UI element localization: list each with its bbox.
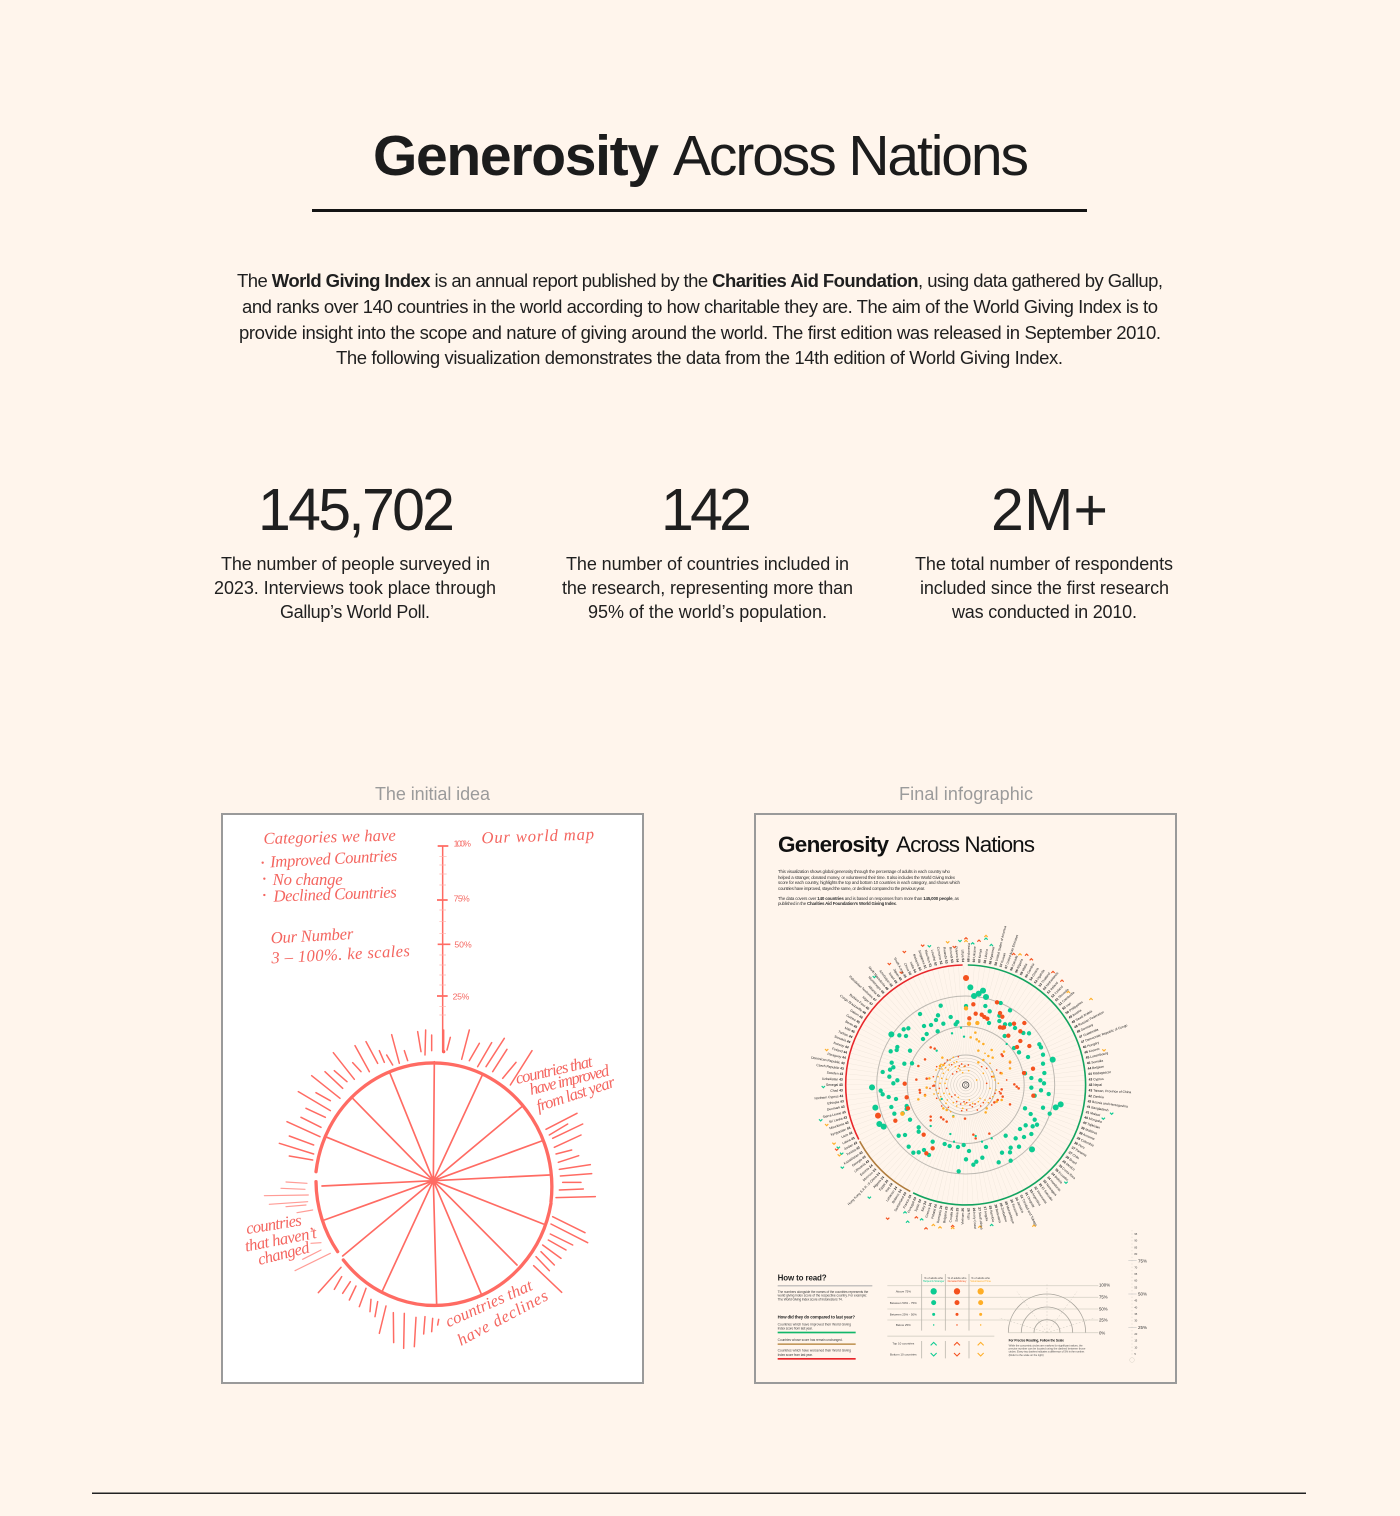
- stat: people surveyed: [214, 477, 496, 622]
- country labels, left half: Libya 54: [961, 950, 965, 962]
- country labels, right half: 44 Belgium: [1087, 1065, 1104, 1071]
- legend table: % of adults who: [948, 1276, 967, 1280]
- country labels, left half: North Macedonia 48: [867, 966, 889, 991]
- country labels, right half: 41 Malawi: [1085, 1110, 1101, 1117]
- sketch wheel with spokes and ticks: countries that: [514, 1052, 595, 1088]
- semicircle scale diagram: 50%: [1099, 1306, 1108, 1311]
- country labels, left half: Burundi 53: [948, 947, 954, 963]
- country labels, left half: Albania 47: [867, 985, 881, 999]
- title: [373, 124, 1029, 188]
- country labels, left half: Burkina Faso 46: [849, 993, 870, 1011]
- data dots: [872, 978, 1061, 1171]
- country labels, left half: Romania 24: [936, 1205, 943, 1223]
- vertical reference scale: 40: [1134, 1305, 1138, 1309]
- country labels, right half: 26 Togo: [966, 1208, 971, 1220]
- country labels, right half: 57 United Arab Emirates: [1004, 934, 1019, 969]
- stat: people surveyed: Gallup’s World Poll.: [280, 602, 430, 622]
- country labels, left half: Laos 43: [841, 1131, 853, 1139]
- country labels, right half: 49 Austria: [1068, 1008, 1082, 1020]
- country labels, right half: 54 Ghana: [1029, 967, 1040, 981]
- country labels, right half: 46 Hungary: [1082, 1040, 1100, 1050]
- semicircle scale diagram: 0%: [1099, 1330, 1105, 1335]
- country labels, left half: Congo Brazzaville 46: [839, 994, 867, 1015]
- country labels, right half: 68 Indonesia: [966, 943, 971, 962]
- country labels, right half: 28 Namibia: [988, 1205, 995, 1222]
- vertical reference scale: 60: [1134, 1279, 1138, 1283]
- legend table: Top 10 countries: [892, 1342, 915, 1346]
- country labels, right half: 58 United States of America: [994, 925, 1007, 966]
- country labels, left half: Kazakhstan 43: [843, 1150, 864, 1166]
- vertical reference scale: 5: [1134, 1352, 1136, 1356]
- stat: people surveyed: The number of people surveyed in: [221, 554, 490, 574]
- country labels, right half: 51 Cambodia: [1058, 991, 1075, 1006]
- note: precise reading: [1009, 1338, 1086, 1357]
- country labels, right half: 35 Costa Rica: [1058, 1164, 1076, 1180]
- country labels, right half: 53 Thailand: [1038, 971, 1051, 988]
- mini description: countries have improved, stayed the same, or declined compared to the previous year.: [778, 886, 925, 891]
- panel: initial sketch: [222, 814, 643, 1383]
- country labels, left half: Serbia 25: [955, 1207, 960, 1222]
- vertical reference scale: 80: [1134, 1252, 1138, 1256]
- note: precise reading: While the concentric circles are markers for significant values, the: [1009, 1343, 1083, 1347]
- country labels, left half: Palestinian Territories 47: [848, 975, 877, 1003]
- country labels, right half: [966, 925, 1131, 1230]
- country labels, left half: Comoros 52: [936, 946, 943, 965]
- how to read text: How did they do compared to last year?: [778, 1315, 855, 1320]
- sketch notes and vertical scale: Our Number: [270, 924, 354, 947]
- vertical reference scale: 45: [1134, 1299, 1138, 1303]
- country labels, left half: Jordan 43: [843, 1141, 858, 1151]
- panel: final infographic: [755, 814, 1176, 1383]
- country labels, left half: Norway 44: [833, 1041, 849, 1050]
- vertical reference scale: 55: [1134, 1285, 1138, 1289]
- country labels, left half: Guyana 54: [954, 946, 960, 963]
- country labels, left half: Morocco 24: [862, 1167, 877, 1182]
- country labels, left half: Lesotho 52: [930, 949, 938, 966]
- intro paragraph: The following visualization demonstrates the data from the 14th edition of World Giving Index.: [336, 347, 1063, 368]
- legend table: Below 25%: [896, 1323, 911, 1327]
- country labels, right half: 57 Kuwait: [999, 953, 1007, 968]
- country labels, left half: Finland 44: [832, 1047, 848, 1055]
- stat: total respondents: included since the first research: [920, 578, 1169, 598]
- vertical reference scale: 25%: [1138, 1325, 1147, 1330]
- country labels, right half: 53 Netherlands: [1042, 971, 1060, 991]
- country labels, left half: Paraguay 44: [827, 1052, 846, 1060]
- how to read text: Countries which have worsened their World Giving: [778, 1349, 851, 1353]
- how to read text: [778, 1274, 872, 1360]
- how to read text: world giving index score of the respective country. For example:: [778, 1294, 867, 1298]
- country labels, right half: 34 Honduras: [1046, 1175, 1062, 1192]
- legend table: [887, 1274, 1098, 1358]
- country labels, right half: 56 Nigeria: [1014, 958, 1024, 974]
- sketch wheel with spokes and ticks: from last year: [534, 1072, 618, 1115]
- mini description: This visualization shows global generosity through the percentage of adults in each country who: [778, 869, 951, 874]
- country labels, right half: 33 El Salvador: [1038, 1182, 1054, 1203]
- country labels, left half: Dominican Republic 43: [811, 1056, 845, 1065]
- country labels, left half: Belarus 24: [891, 1188, 903, 1204]
- country labels, right half: 51 Slovenia: [1054, 988, 1070, 1002]
- country labels, left half: Slovakia 44: [834, 1035, 851, 1044]
- country labels, right half: 38 Colombia: [1076, 1136, 1095, 1148]
- country labels, left half: China 50: [903, 962, 912, 976]
- sketch notes and vertical scale: No change: [272, 870, 343, 889]
- country labels, left half: Kyrgyzstan 43: [830, 1126, 851, 1137]
- country labels, left half: Estonia 24: [859, 1163, 874, 1177]
- country labels, left half: Sweden 43: [827, 1071, 844, 1076]
- stat: countries included: 142: [661, 477, 752, 543]
- country labels, right half: 48 Germany: [1076, 1023, 1094, 1034]
- country labels, left half: Uzbekistan 43: [822, 1077, 843, 1082]
- legend table: Between 25% - 50%: [890, 1313, 917, 1317]
- how to read text: The World Giving Index score of Indonesia is 74.: [778, 1298, 843, 1302]
- legend table: % of adults who: [924, 1276, 944, 1280]
- intro paragraph: The World Giving Index is an annual report published by the Charities Aid Foundation, using data gathered by Gallup,: [237, 270, 1163, 291]
- country labels, left half: Mauritius 51: [924, 949, 933, 968]
- note: precise reading: For Precise Reading, Follow the Scale: [1009, 1338, 1064, 1342]
- mini description: published in the Charities Aid Foundation’s World Giving Index.: [778, 901, 897, 906]
- country labels, left half: Azerbaijan 48: [878, 969, 894, 988]
- country labels, right half: 33 Nicaragua: [1042, 1179, 1058, 1197]
- country labels, left half: Croatia 25: [949, 1207, 954, 1223]
- country labels, right half: 42 Zambia: [1088, 1094, 1104, 1099]
- country labels, left half: Latvia 43: [842, 1136, 856, 1145]
- country labels, left half: South Korea 49: [893, 957, 908, 979]
- country labels, right half: 30 Jamaica: [1014, 1196, 1025, 1214]
- mini description: The data covers over 140 countries and is based on responses from more than 145,000 people, as: [778, 896, 960, 901]
- stat: people surveyed: 145,702: [258, 477, 455, 543]
- vertical reference scale: 95: [1134, 1232, 1138, 1236]
- country labels, right half: 55 Malta: [1019, 963, 1028, 976]
- country labels, right half: 52 Ireland: [1046, 981, 1059, 995]
- sketch wheel with spokes and ticks: changed: [256, 1238, 312, 1269]
- country labels, left half: Mauritania 43: [829, 1120, 849, 1130]
- sketch notes and vertical scale: 75%: [454, 893, 470, 903]
- country labels, left half: Mali 45: [844, 1026, 856, 1034]
- stat: countries included: [562, 477, 853, 622]
- country labels, left half: Italy 24: [920, 1200, 928, 1212]
- country labels, right half: 36 Mexico: [1061, 1159, 1076, 1172]
- country labels, left half: Israel 49: [888, 972, 898, 985]
- country labels, left half: Niger 47: [862, 995, 874, 1007]
- vertical reference scale: 35: [1134, 1312, 1138, 1316]
- country labels, right half: 29 Zimbabwe: [999, 1202, 1008, 1223]
- how to read text: How to read?: [778, 1274, 827, 1283]
- country labels, left half: Rwanda 53: [942, 947, 949, 964]
- vertical reference scale: 15: [1134, 1339, 1138, 1343]
- legend table: Bottom 10 countries: [890, 1353, 917, 1357]
- semicircle scale diagram: 75%: [1099, 1294, 1108, 1299]
- sketch notes and vertical scale: 25%: [453, 991, 470, 1001]
- semicircle scale diagram: 100%: [1099, 1283, 1110, 1288]
- country labels, right half: 30 Tanzania: [1009, 1199, 1019, 1217]
- sketch notes and vertical scale: Categories we have: [263, 826, 397, 848]
- vertical reference scale: 70: [1134, 1265, 1138, 1269]
- country labels, left half: Iraq 24: [884, 1182, 894, 1193]
- country labels, right half: 42 Bosnia and Herzegovina: [1087, 1099, 1128, 1109]
- sketch notes and vertical scale: 100%: [454, 838, 471, 848]
- country labels, left half: Tunisia 43: [846, 1145, 861, 1157]
- country labels, right half: 46 Kosovo: [1084, 1047, 1100, 1055]
- country labels, left half: Senegal 43: [826, 1083, 843, 1087]
- title: Across Nations: [673, 124, 1029, 188]
- note: precise reading: circles. Every two dashes indicates a difference of 5% in the number.: [1009, 1349, 1085, 1353]
- country labels, left half: Guinea 45: [845, 1013, 861, 1025]
- country labels, right half: 43 Nepal: [1089, 1083, 1102, 1087]
- mini description: [778, 869, 961, 906]
- country labels, right half: 58 Myanmar: [988, 945, 996, 965]
- country labels, left half: Bulgaria 25: [942, 1206, 949, 1223]
- stat: total respondents: [915, 477, 1173, 622]
- legend table: % of adults who: [971, 1276, 991, 1280]
- country labels, right half: 47 Democratic Republic of Congo: [1080, 1023, 1128, 1044]
- sketch wheel with spokes and ticks: [243, 1030, 618, 1350]
- sketch wheel with spokes and ticks: that haven’t: [243, 1223, 318, 1256]
- note: precise reading: precise number can be located using the dashed between those: [1009, 1346, 1086, 1350]
- country labels, right half: 45 Luxembourg: [1085, 1051, 1109, 1060]
- country labels, left half: Portugal 24: [907, 1196, 917, 1213]
- radial grid: [877, 996, 1055, 1174]
- country labels, right half: 54 Uganda: [1033, 969, 1046, 984]
- country labels, right half: 40 Tajikistan: [1082, 1120, 1101, 1130]
- country labels, left half: Egypt 24: [878, 1179, 889, 1192]
- vertical reference scale: 10: [1134, 1345, 1138, 1349]
- legend table: Donated Money: [948, 1279, 967, 1283]
- country labels, left half: Northern Cyprus 43: [814, 1094, 844, 1100]
- legend table: Between 50% - 75%: [890, 1301, 917, 1305]
- country labels, left half: Malaysia 50: [912, 954, 922, 972]
- country labels, right half: 28 Botswana: [994, 1204, 1002, 1223]
- vertical reference scale: 20: [1134, 1332, 1138, 1336]
- semicircle scale diagram: 25%: [1099, 1318, 1108, 1323]
- country labels, left half: Georgia 43: [851, 1155, 867, 1168]
- mini title: Generosity: [778, 832, 889, 857]
- country labels, left half: Vietnam 25: [961, 1208, 965, 1225]
- chevrons: top and bottom ten markers: [819, 935, 1113, 1229]
- legend: how to read: [778, 1230, 1147, 1362]
- how to read text: The numbers alongside the names of the countries represents the: [778, 1290, 869, 1294]
- legend table: Volunteered Time: [970, 1279, 992, 1283]
- country labels, left half: Benin 45: [845, 1020, 858, 1029]
- country labels, right half: 37 Panama: [1071, 1146, 1087, 1158]
- mini title: Across Nations: [896, 832, 1035, 857]
- radial chart: [811, 925, 1131, 1230]
- country labels, left half: Sri Lanka 43: [829, 1115, 848, 1124]
- country labels, right half: 27 Angola: [983, 1206, 989, 1221]
- sketch notes and vertical scale: Declined Countries: [272, 882, 397, 906]
- mini title: [778, 832, 1035, 857]
- country labels, right half: 39 Armenia: [1078, 1131, 1095, 1141]
- country labels, right half: 37 Chile: [1068, 1150, 1080, 1160]
- country labels, right half: 45 Somalia: [1086, 1059, 1104, 1065]
- note: precise reading: (Refer to the scale on the right): [1009, 1353, 1044, 1357]
- country labels, right half: 44 Madagascar: [1088, 1070, 1112, 1076]
- country labels, left half: Chad 43: [830, 1088, 843, 1093]
- country labels, right half: 29 Mozambique: [1004, 1201, 1015, 1224]
- vertical reference scale: 90: [1134, 1239, 1138, 1243]
- country labels, right half: 39 Moldova: [1080, 1126, 1098, 1136]
- stat: countries included: the research, representing more than: [562, 578, 853, 598]
- country labels, left half: France 24: [902, 1194, 912, 1209]
- country labels, right half: 41 Bangladesh: [1086, 1105, 1109, 1112]
- intro paragraph: [237, 270, 1163, 368]
- sketch notes and vertical scale: Improved Countries: [269, 846, 398, 871]
- country labels, right half: 36 Brazil: [1065, 1155, 1078, 1166]
- country labels, left half: Turkiye 44: [837, 1030, 853, 1039]
- country labels, left half: India 50: [909, 961, 917, 974]
- country labels, right half: 35 Ecuador: [1054, 1168, 1070, 1183]
- stat: total respondents: was conducted in 2010.: [951, 602, 1137, 622]
- country labels, right half: 43 Cyprus: [1088, 1077, 1104, 1082]
- country labels, right half: 50 Philippines: [1065, 1000, 1084, 1015]
- country labels, left half: Ethiopia 43: [827, 1099, 844, 1105]
- country labels, left half: Czech Republic 43: [816, 1063, 844, 1071]
- sketch notes and vertical scale: Our world map: [481, 824, 594, 847]
- country labels, right half: 60 Kenya: [977, 949, 983, 963]
- outer arcs: improved, unchanged, declined: [846, 965, 1086, 1205]
- country labels, right half: 60 Ukraine: [972, 946, 977, 962]
- country labels, left half: Japan 49: [892, 968, 903, 982]
- vertical reference scale: [1128, 1230, 1147, 1362]
- footer rule: [92, 1492, 1306, 1494]
- country labels, right half: 48 Russian Federation: [1073, 1010, 1105, 1029]
- semicircle scale diagram: [999, 1283, 1110, 1335]
- country labels, left half: Algeria 24: [872, 1175, 885, 1189]
- country labels, right half: 31 Uruguay: [1024, 1191, 1036, 1209]
- country labels, right half: 26 Ivory Coast: [972, 1208, 977, 1229]
- country labels, right half: 40 Mongolia: [1084, 1115, 1102, 1124]
- vertical reference scale: 65: [1134, 1272, 1138, 1276]
- intro paragraph: and ranks over 140 countries in the world according to how charitable they are. The aim of the World Giving Index is to: [242, 296, 1158, 317]
- country labels, right half: 43 Taiwan, Province of China: [1088, 1088, 1131, 1094]
- country labels, right half: 47 Guatemala: [1078, 1027, 1099, 1039]
- country labels, right half: 50 Iran: [1061, 1001, 1072, 1011]
- stat: people surveyed: 2023. Interviews took place through: [214, 578, 496, 598]
- mini description: score for each country, highlights the top and bottom 10 countries in each category, and shows which: [778, 880, 961, 885]
- country labels, left half: Poland 24: [930, 1204, 938, 1219]
- legend table: Helped A Stranger: [923, 1279, 945, 1283]
- country labels, left half: Denmark 43: [827, 1105, 845, 1112]
- how to read text: Countries which have improved their World Giving: [778, 1323, 851, 1327]
- vertical reference scale: 85: [1134, 1245, 1138, 1249]
- heading: final infographic: Final infographic: [899, 784, 1033, 804]
- country labels, left half: Lithuania 43: [853, 1159, 870, 1173]
- country labels, left half: Greece 24: [924, 1202, 933, 1218]
- country labels, left half: Lebanon 24: [885, 1185, 898, 1202]
- country labels, left half: [811, 946, 965, 1225]
- country labels, right half: 27 South Africa: [977, 1207, 984, 1230]
- intro paragraph: provide insight into the scope and nature of giving around the world. The first edition was released in September 2010.: [239, 322, 1161, 343]
- sketch wheel with spokes and ticks: countries: [245, 1210, 303, 1238]
- title: Generosity: [373, 124, 659, 188]
- country labels, right half: 58 Liberia: [983, 949, 989, 964]
- country labels, right half: 38 Peru: [1073, 1141, 1086, 1150]
- country labels, right half: 32 Argentina: [1029, 1189, 1042, 1207]
- sketch notes and vertical scale: 3 – 100%. ke scales: [270, 941, 410, 967]
- country labels, right half: 34 Bolivia: [1050, 1171, 1063, 1185]
- how to read text: Index score from last year.: [778, 1353, 813, 1357]
- country labels, left half: Gabon 46: [849, 1008, 864, 1020]
- stat: total respondents: The total number of respondents: [915, 554, 1173, 574]
- country labels, right half: 55 Gambia: [1024, 962, 1035, 979]
- country labels, left half: Hong Kong S.A.R. of China 24: [847, 1171, 881, 1206]
- mini description: helped a stranger, donated money, or volunteered their time. It also includes the World Giving Index: [778, 875, 956, 880]
- sketch notes and vertical scale: [263, 824, 594, 1053]
- country labels, left half: Switzerland 24: [893, 1191, 908, 1212]
- how to read text: Index score from last year.: [778, 1326, 813, 1330]
- stat: countries included: 95% of the world’s population.: [588, 602, 827, 622]
- stat: total respondents: 2M+: [991, 477, 1108, 543]
- country labels, left half: Sierra Leone 43: [822, 1110, 846, 1119]
- vertical reference scale: 30: [1134, 1319, 1138, 1323]
- how to read text: Countries whose score has remain unchanged.: [778, 1338, 843, 1342]
- sketch wheel with spokes and ticks: have declines: [454, 1286, 551, 1350]
- country labels, right half: 32 Venezuela: [1033, 1186, 1048, 1205]
- sketch wheel with spokes and ticks: have improved: [527, 1061, 612, 1099]
- sketch notes and vertical scale: 50%: [454, 939, 472, 949]
- country labels, left half: Singapore 51: [917, 949, 928, 970]
- vertical reference scale: 50%: [1138, 1292, 1147, 1297]
- country labels, right half: 31 Trinidad and Tobago: [1019, 1194, 1038, 1227]
- legend table: Above 75%: [896, 1290, 911, 1294]
- country labels, right half: 56 Canada: [1009, 955, 1019, 971]
- stat: countries included: The number of countries included in: [566, 554, 849, 574]
- vertical reference scale: 75%: [1138, 1258, 1147, 1263]
- country labels, right half: 49 Saudi Arabia: [1071, 1009, 1093, 1024]
- country labels, left half: Spain 24: [914, 1198, 922, 1212]
- country labels, left half: Montenegro 48: [867, 975, 885, 995]
- sketch wheel with spokes and ticks: countries that: [442, 1276, 536, 1331]
- country labels, right half: 52 Iceland: [1050, 985, 1064, 999]
- title rule: [312, 209, 1087, 212]
- heading: initial idea: The initial idea: [375, 784, 491, 804]
